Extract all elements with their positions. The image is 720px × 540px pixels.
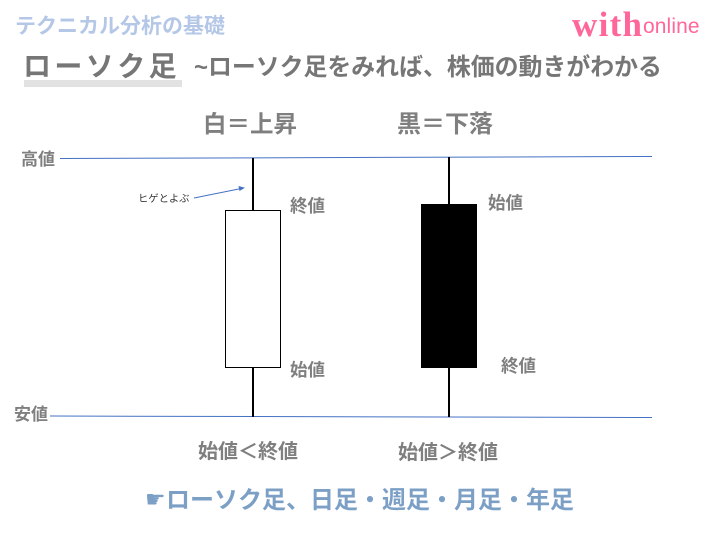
subtitle: ~ローソク足をみれば、株価の動きがわかる bbox=[194, 54, 662, 81]
logo: with online: online bbox=[643, 15, 700, 38]
annotation: wick: ヒゲとよぶ bbox=[138, 194, 189, 205]
caption: white candle: 始値＜終値 bbox=[198, 441, 298, 463]
section title: テクニカル分析の基礎 bbox=[15, 15, 225, 38]
label: high price: 高値 bbox=[21, 150, 55, 169]
label: black candle open: 始値 bbox=[488, 193, 523, 213]
label: white candle close: 終値 bbox=[290, 196, 325, 216]
high price line bbox=[60, 156, 652, 158]
arrow: wick pointer bbox=[194, 186, 245, 198]
heading: black candle: 黒＝下落 bbox=[397, 111, 493, 138]
label: white candle open: 始値 bbox=[290, 360, 325, 380]
logo: with online: with bbox=[572, 5, 643, 44]
footer note: ☛ bbox=[145, 487, 166, 513]
main heading: ローソク足 bbox=[23, 51, 180, 82]
heading underline highlight bbox=[24, 80, 182, 87]
footer note: ローソク足、日足・週足・月足・年足 bbox=[166, 487, 574, 514]
label: low price: 安値 bbox=[14, 405, 48, 424]
logo: with online bbox=[572, 5, 700, 44]
label: black candle close: 終値 bbox=[501, 356, 536, 376]
heading: white candle: 白＝上昇 bbox=[203, 111, 297, 137]
low price line bbox=[50, 416, 652, 418]
white candle bbox=[226, 158, 280, 417]
black candle bbox=[421, 157, 477, 417]
caption: black candle: 始値＞終値 bbox=[398, 442, 498, 464]
